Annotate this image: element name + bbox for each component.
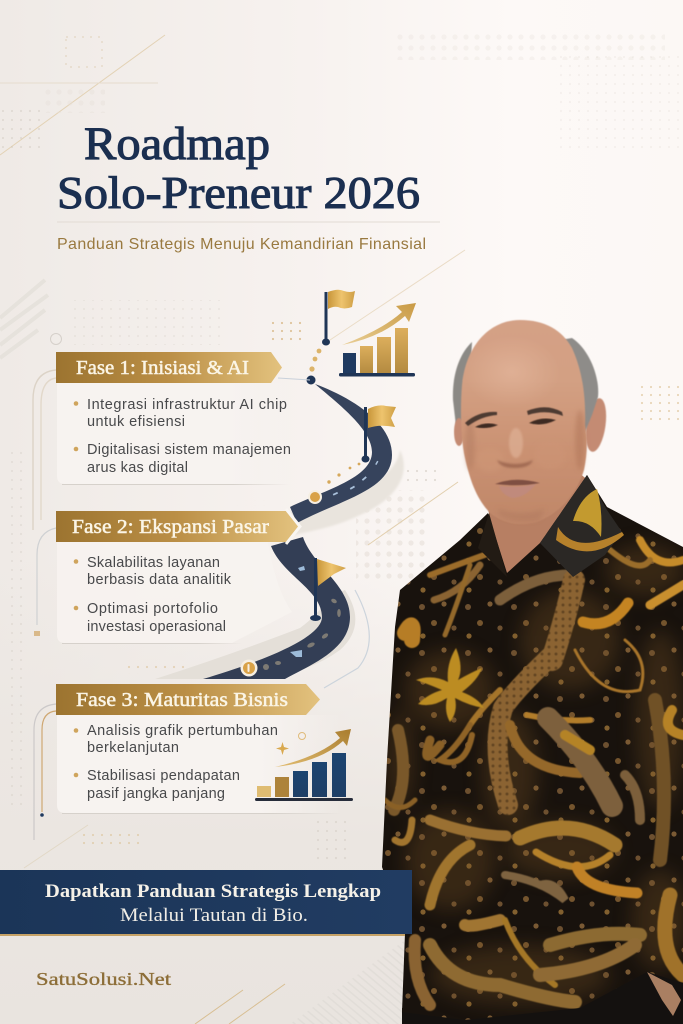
list: fase 2 items: Skalabilitas layanan bbox=[87, 555, 220, 571]
left collar bbox=[478, 513, 507, 577]
list: fase 3 items: Analisis grafik pertumbuhan bbox=[87, 723, 278, 739]
head bbox=[461, 320, 587, 524]
list: fase 3 items: berkelanjutan bbox=[87, 740, 179, 756]
title: Solo-Preneur 2026 bbox=[57, 167, 420, 218]
shirt with batik pattern bbox=[380, 470, 683, 1024]
ribbon: fase 1 heading bbox=[56, 352, 282, 383]
call to action banner: Melalui Tautan di Bio. bbox=[120, 906, 308, 926]
list: fase 3 items: pasif jangka panjang bbox=[87, 786, 225, 802]
hair left bbox=[453, 342, 472, 430]
call to action banner: Dapatkan Panduan Strategis Lengkap bbox=[45, 882, 381, 902]
list: fase 2 items: Optimasi portofolio bbox=[87, 601, 218, 617]
nose bbox=[497, 428, 533, 468]
icon: lower flag bbox=[310, 558, 346, 621]
left ear lobe bbox=[454, 418, 464, 446]
list: fase 1 items: arus kas digital bbox=[87, 460, 188, 476]
list: fase 1 items bbox=[74, 397, 291, 476]
list: fase 1 items: untuk efisiensi bbox=[87, 414, 185, 430]
trousers bbox=[402, 962, 683, 1024]
panel: fase 2 bbox=[56, 509, 300, 644]
ribbon: fase 3 heading bbox=[56, 684, 320, 715]
eyebrows bbox=[465, 412, 497, 426]
road: lower winding segment bbox=[155, 537, 355, 679]
batik motifs bbox=[385, 540, 683, 1005]
panel: fase 1 bbox=[56, 352, 292, 485]
chart: growth bars bbox=[255, 729, 353, 801]
batik flower bbox=[416, 648, 484, 722]
neck bbox=[486, 470, 588, 575]
hand in pocket bbox=[647, 972, 681, 1016]
list: fase 1 items: Integrasi infrastruktur AI chip bbox=[87, 397, 287, 413]
ear bbox=[583, 397, 609, 453]
ribbon: fase 3 heading: Fase 3: Maturitas Bisnis bbox=[76, 689, 288, 711]
list: fase 1 items: Digitalisasi sistem manajemen bbox=[87, 442, 291, 458]
list: fase 2 items: investasi operasional bbox=[87, 619, 226, 635]
face shading bbox=[465, 410, 585, 521]
ribbon: fase 2 heading: Fase 2: Ekspansi Pasar bbox=[72, 516, 269, 538]
call to action banner bbox=[0, 870, 412, 936]
brand name: SatuSolusi.Net bbox=[36, 969, 171, 989]
icon: middle flag bbox=[362, 405, 396, 462]
hair right bbox=[560, 338, 598, 432]
subtitle: Panduan Strategis Menuju Kemandirian Finansial bbox=[57, 236, 426, 253]
ribbon: fase 1 heading: Fase 1: Inisiasi & AI bbox=[76, 357, 249, 379]
title bbox=[57, 118, 420, 218]
broad batik tone patches bbox=[386, 544, 683, 1005]
collar gold leaf bbox=[573, 489, 602, 537]
list: fase 2 items bbox=[62, 555, 242, 644]
icon: top flag and gold bar chart bbox=[306, 290, 416, 384]
list: fase 3 items bbox=[74, 723, 278, 802]
eyes bbox=[475, 423, 498, 428]
road: upper winding segment bbox=[275, 378, 404, 540]
ribbon: fase 2 heading bbox=[56, 509, 300, 544]
list: fase 3 items: Stabilisasi pendapatan bbox=[87, 768, 240, 784]
list: fase 2 items: berbasis data analitik bbox=[87, 572, 232, 588]
panel: fase 3 bbox=[56, 684, 353, 814]
right collar bbox=[540, 475, 622, 577]
person photo bbox=[380, 320, 683, 1024]
mouth bbox=[495, 480, 540, 498]
title: Roadmap bbox=[84, 118, 270, 170]
